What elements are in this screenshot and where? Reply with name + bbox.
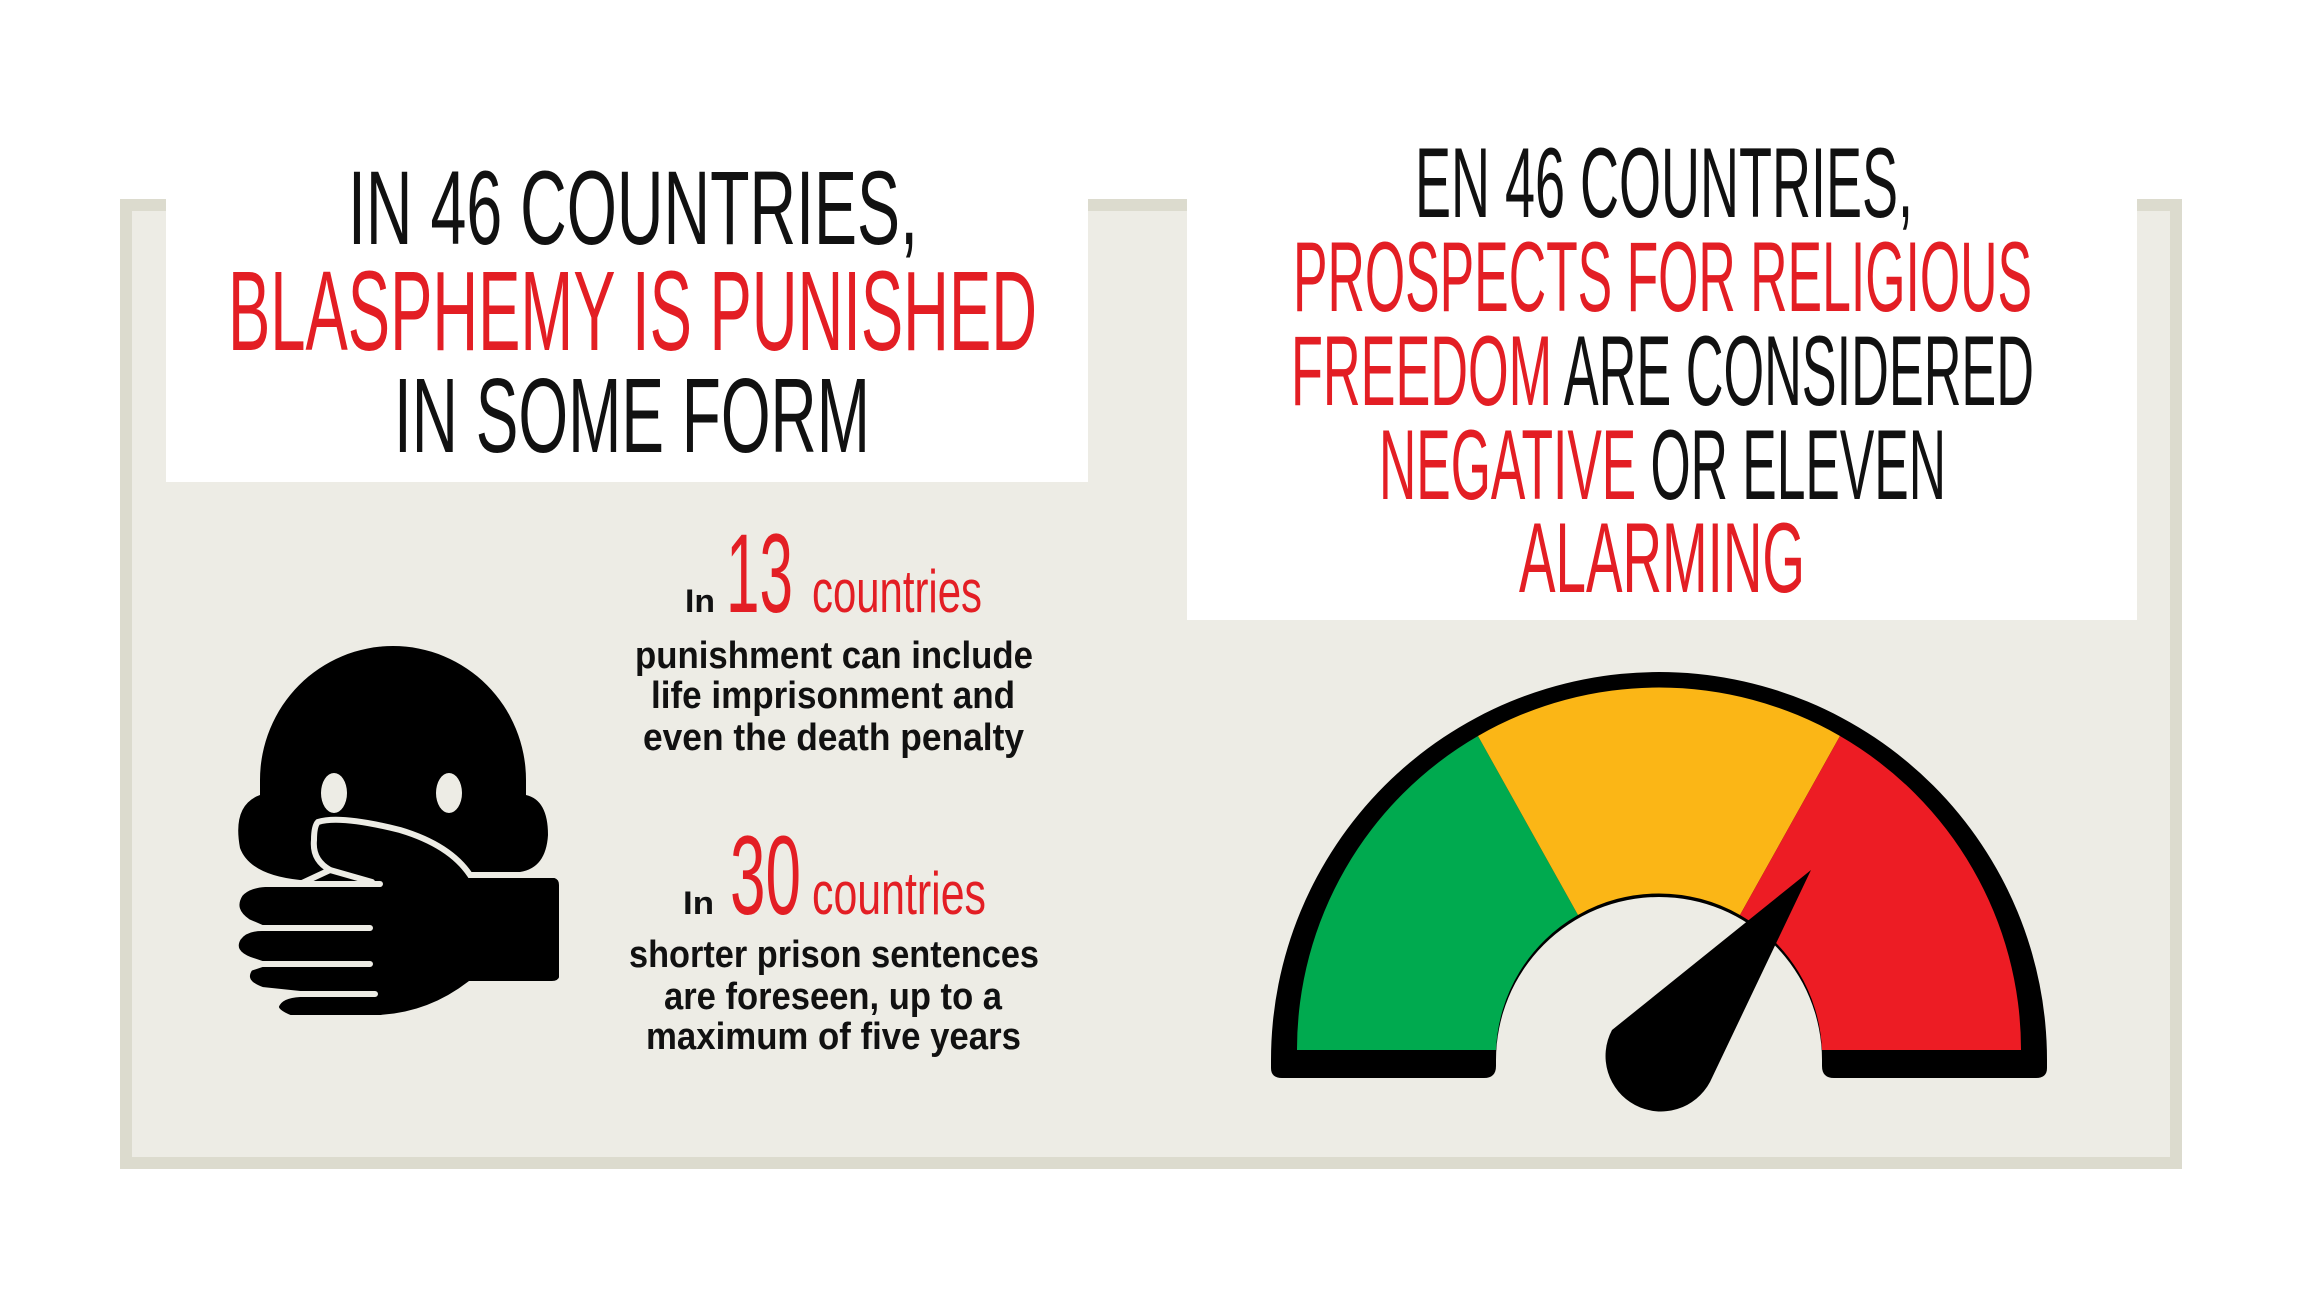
right title: EN 46 COUNTRIES, bbox=[1415, 127, 1913, 238]
right title: ALARMING bbox=[1519, 502, 1805, 613]
left title: BLASPHEMY IS PUNISHED bbox=[228, 248, 1037, 374]
right title box bbox=[1187, 127, 2137, 620]
right title: NEGATIVE OR ELEVEN bbox=[1379, 409, 1946, 520]
left title bbox=[228, 150, 1037, 475]
right title bbox=[1291, 127, 2034, 613]
gauge: yellow segment bbox=[1478, 688, 1840, 915]
stat: 30 countries: 30 bbox=[730, 813, 801, 938]
stat: 13 countries: even the death penalty bbox=[643, 717, 1024, 759]
gauge bbox=[1271, 672, 2047, 1111]
stat: 30 countries: shorter prison sentences bbox=[629, 934, 1039, 976]
stat: 13 countries: life imprisonment and bbox=[651, 675, 1015, 717]
stat: 30 countries: maximum of five years bbox=[646, 1016, 1021, 1058]
stat: 13 countries: 13 bbox=[726, 511, 793, 636]
stat: 30 countries bbox=[629, 813, 1039, 1058]
stat: 13 countries: punishment can include bbox=[635, 635, 1033, 677]
panel background bbox=[126, 205, 2176, 1163]
stat: 13 countries: In bbox=[685, 583, 715, 619]
stat: 30 countries: are foreseen, up to a bbox=[664, 976, 1003, 1018]
gauge: red segment bbox=[1740, 736, 2021, 1050]
hand bbox=[236, 820, 562, 1018]
stat: 13 countries bbox=[635, 511, 1033, 759]
stat: 30 countries: In bbox=[683, 885, 714, 921]
icon: face covering mouth bbox=[236, 646, 562, 1018]
left title: IN SOME FORM bbox=[394, 357, 870, 475]
stat: 13 countries: countries bbox=[812, 558, 982, 625]
gauge needle bbox=[1606, 870, 1811, 1111]
left title: IN 46 COUNTRIES, bbox=[348, 150, 918, 267]
stat: 30 countries: countries bbox=[812, 860, 986, 927]
left title box bbox=[166, 150, 1088, 482]
gauge: green segment bbox=[1297, 736, 1578, 1050]
